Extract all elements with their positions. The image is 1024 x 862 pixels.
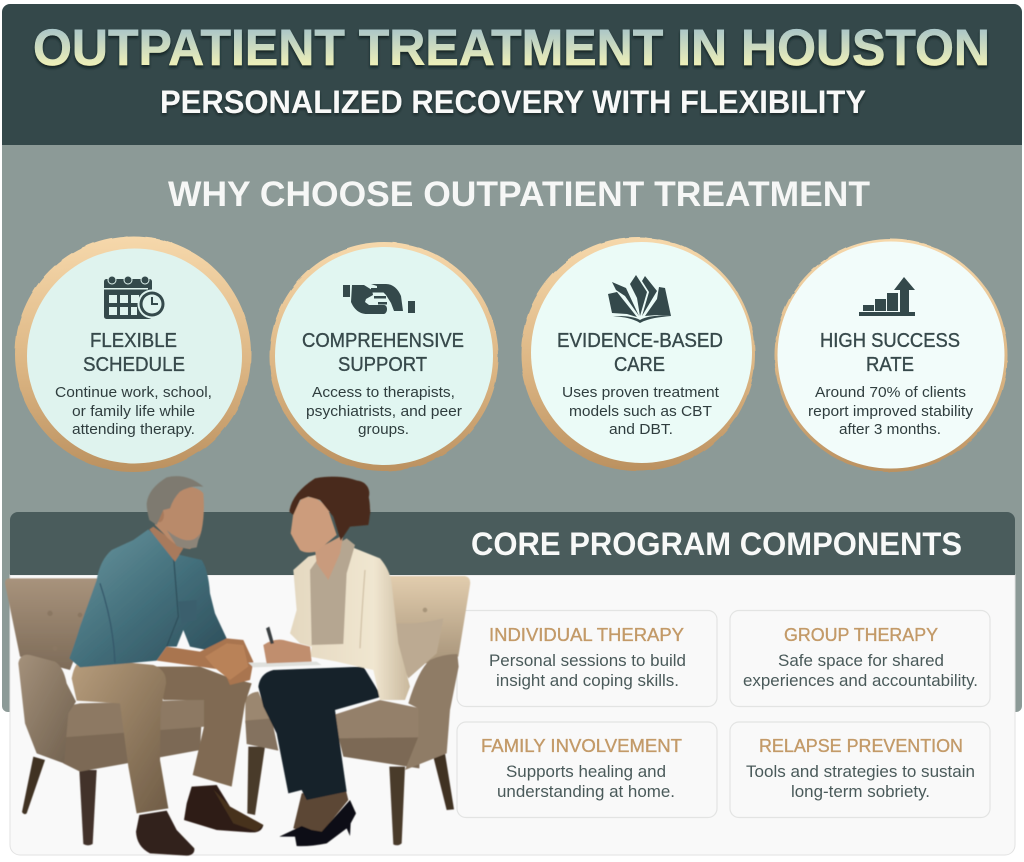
card: group therapy: experiences and accountability. [743,672,978,690]
card: relapse prevention: Tools and strategies to sustain [746,763,975,781]
illustration: counselor and client seated in armchairs [5,476,470,856]
header band [10,512,1015,575]
card: individual therapy [457,610,717,706]
card: family involvement: FAMILY INVOLVEMENT [481,735,682,756]
right chair [245,576,470,845]
panel: flexible schedule [15,236,251,472]
text: comprehensive support description: groups. [358,421,409,438]
card: group therapy: Safe space for shared [778,652,944,670]
panel: high success rate [774,239,1008,472]
heading: comprehensive support: COMPREHENSIVE [302,330,464,352]
text: high success rate description: Around 70% of clients [815,384,966,401]
woman [248,477,410,846]
heading: comprehensive support [302,330,464,376]
panel: core program components [10,512,1015,855]
panel: evidence-based care [521,237,755,471]
text: flexible schedule description: or family life while [72,403,195,420]
icon: calendar with clock [104,276,166,319]
heading: comprehensive support: SUPPORT [338,354,427,376]
text: high success rate description: report improved stability [808,403,974,420]
text: flexible schedule description [55,384,212,438]
man [69,476,263,856]
text: evidence-based care description: models such as CBT [569,403,712,420]
icon: rising bar chart [859,277,915,316]
heading: high success rate [820,330,960,376]
text: evidence-based care description: and DBT. [609,421,673,438]
text: comprehensive support description [306,384,462,438]
heading: flexible schedule [83,330,185,376]
heading: high success rate: HIGH SUCCESS [820,330,960,352]
card: family involvement [457,722,717,818]
card: relapse prevention [730,722,990,818]
heading: flexible schedule: FLEXIBLE [90,330,177,352]
card: relapse prevention: RELAPSE PREVENTION [759,735,963,756]
text: flexible schedule description: Continue work, school, [55,384,212,401]
icon: helping hands [343,284,415,314]
heading: evidence-based care: CARE [614,354,665,376]
icon: open book [608,275,671,323]
text: high success rate description: after 3 months. [839,421,941,438]
text: evidence-based care description [562,384,720,438]
card: family involvement: Supports healing and [506,763,666,781]
subtitle: PERSONALIZED RECOVERY WITH FLEXIBILITY [160,84,866,120]
card: group therapy: GROUP THERAPY [784,624,938,645]
text: evidence-based care description: Uses proven treatment [562,384,720,401]
heading: core program components: CORE PROGRAM COMPONENTS [471,526,962,562]
heading: flexible schedule: SCHEDULE [83,354,185,376]
heading: evidence-based care: EVIDENCE-BASED [557,330,723,352]
card: family involvement: understanding at home. [497,783,675,801]
card: relapse prevention: long-term sobriety. [791,783,930,801]
panel: header band [2,4,1022,145]
card: individual therapy: INDIVIDUAL THERAPY [489,624,684,645]
heading: why choose outpatient treatment: WHY CHOOSE OUTPATIENT TREATMENT [168,175,870,214]
card: individual therapy: Personal sessions to build [489,652,686,670]
left chair [5,578,205,845]
heading: high success rate: RATE [866,354,914,376]
card: group therapy [730,610,990,706]
text: comprehensive support description: psychiatrists, and peer [306,403,462,420]
text: high success rate description [808,384,974,438]
card: individual therapy: insight and coping skills. [496,672,679,690]
heading: evidence-based care [557,330,723,376]
text: comprehensive support description: Access to therapists, [312,384,455,401]
panel: comprehensive support [270,242,498,471]
text: flexible schedule description: attending therapy. [72,421,195,438]
title: OUTPATIENT TREATMENT IN HOUSTON [33,19,990,76]
